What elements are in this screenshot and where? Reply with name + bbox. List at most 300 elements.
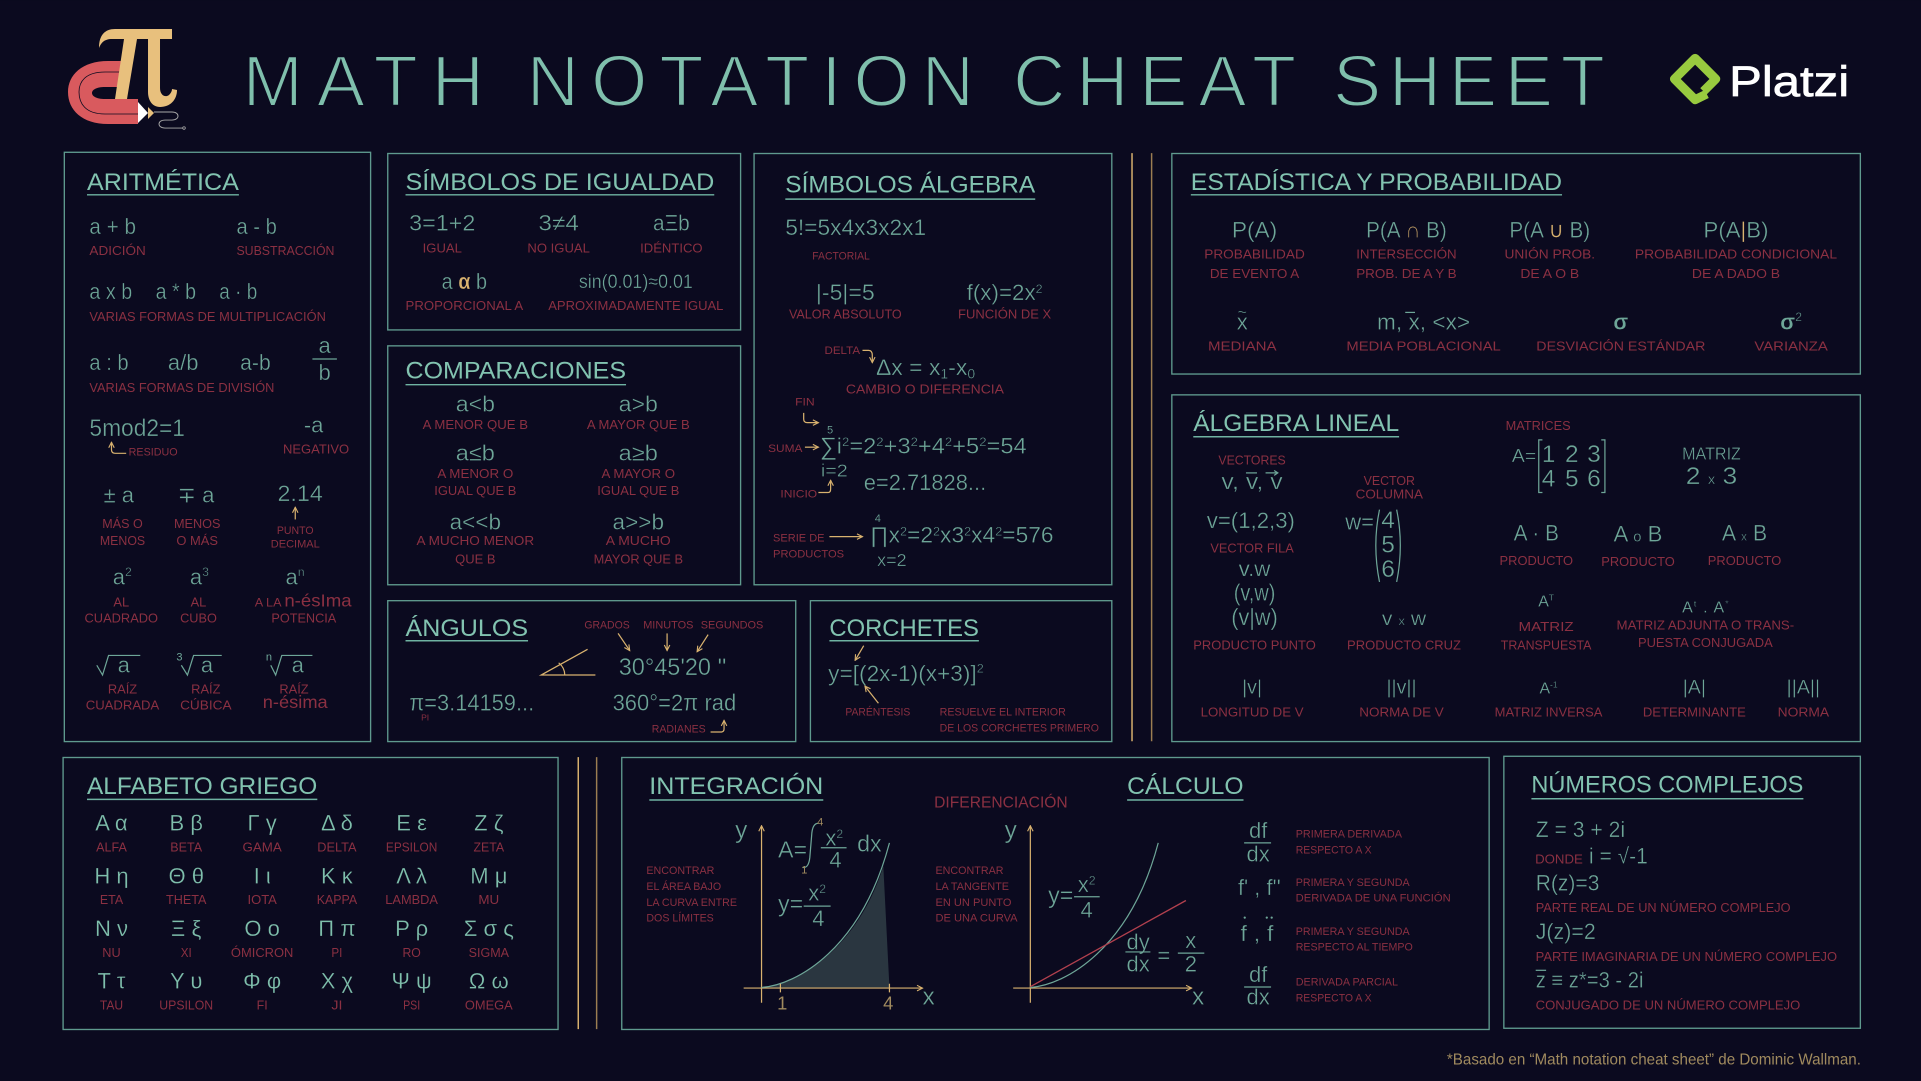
grados minutos segundos [584,619,763,681]
división: a [319,333,332,358]
idéntico [640,210,703,255]
probabilidad condicional: DE A DADO B [1692,266,1780,281]
sumatoria: FIN [795,397,815,409]
menor que: A MENOR QUE B [423,417,528,432]
menor que [423,392,528,432]
producto 3 [1708,520,1781,568]
resuelve el interior [940,706,1099,734]
función de x: 2 [1036,282,1043,296]
matriz 2x3 [1682,443,1741,490]
title: MATH [243,42,484,122]
matriz 2x3: 2 x 3 [1686,463,1737,490]
primera y segunda derivada: DERIVADA DE UNA FUNCIÓN [1296,892,1451,905]
delta: 0 [967,367,975,382]
pi: π=3.14159... [409,690,534,716]
parte imaginaria: J(z)=2 [1536,919,1596,944]
longitud: |v| [1242,676,1262,698]
raíz cúbica: a [201,653,214,678]
igual: IGUAL [423,240,462,255]
donde i [1535,844,1648,869]
fila griega 1: Γ γ [248,811,277,836]
producto punto: (v,w) [1234,579,1275,605]
serie de productos: 2 [964,524,971,538]
texto: encontrar la tangente [936,865,1018,924]
fila griega 2: LAMBDA [385,892,438,907]
matriz adjunta: PUESTA CONJUGADA [1638,635,1773,650]
fila griega 1: Β β [169,811,203,836]
menos o más [174,482,221,548]
radianes: 360°=2π rad [613,690,736,716]
multiplicación [89,279,326,324]
primera derivada: dx [1247,841,1270,866]
vector columna: VECTOR [1364,473,1415,488]
probabilidad condicional: P(A|B) [1704,218,1768,243]
menor o igual: A MENOR O [437,466,513,481]
fórmula: curva integración: y= [778,890,803,916]
serie de productos: 2 [933,524,940,538]
fórmula: dy/dx: x [1185,928,1196,953]
al cuadrado: CUADRADO [85,610,158,625]
fórmula: área: dx [857,830,882,856]
mucho menor [417,509,534,567]
parte real: PARTE REAL DE UN NÚMERO COMPLEJO [1536,900,1791,915]
gráfica: integración: 4 [883,993,893,1014]
resuelve el interior: DE LOS CORCHETES PRIMERO [940,722,1099,734]
intersección [1356,218,1457,281]
función de x: f(x)=2x [967,280,1035,305]
norma: ||A|| [1787,676,1820,698]
división: b [319,360,331,385]
punto decimal: DECIMAL [271,539,320,551]
derivada parcial [1244,962,1398,1010]
sumatoria: 2 [911,435,918,449]
primera y segunda derivada: PRIMERA Y SEGUNDA [1296,877,1410,889]
grados minutos segundos: SEGUNDOS [701,619,763,631]
producto punto: PRODUCTO PUNTO [1193,637,1316,652]
mediana: MEDIANA [1208,338,1277,353]
serie de productos: =2 [907,523,933,548]
substracción [236,214,334,258]
varianza: 2 [1795,310,1802,324]
matrices: 5 [1565,465,1579,492]
matrices: 3 [1587,441,1601,468]
mucho mayor: A MUCHO [606,533,671,548]
delta: DELTA [825,345,861,357]
parte imaginaria [1536,919,1837,964]
radianes: RADIANES [652,724,706,736]
heading: comparaciones: COMPARACIONES [406,358,626,385]
producto cruz: v x w [1382,608,1427,630]
raíz cúbica: CÚBICA [180,697,232,712]
matriz transpuesta: T [1549,592,1555,602]
fila griega 3: ÓMICRON [231,945,293,960]
residuo: RESIDUO [129,447,178,459]
producto punto [1193,558,1316,652]
fila griega 2: Ι ι [254,863,271,888]
fila griega 4 [98,969,513,1013]
texto: encontrar el área: ENCONTRAR [646,865,714,877]
heading: álgebra lineal: ÁLGEBRA LINEAL [1193,410,1399,437]
raíz cúbica: 3 [176,651,183,663]
panel: símbolos álgebra [754,154,1112,585]
gráfica: integración: y [735,817,748,844]
unión [1504,218,1595,281]
al cuadrado [85,564,158,625]
intersección: PROB. DE A Y B [1356,266,1457,281]
conjugado: z ≡ z*=3 - 2i [1536,967,1644,992]
probabilidad condicional [1635,218,1837,281]
raíz cuadrada [86,653,160,712]
sumatoria: 2 [979,435,987,449]
fórmula: curva diferenciación: y= [1048,882,1073,908]
división: a/b [168,350,198,375]
fórmula: curva integración: x [808,880,819,905]
serie de productos: 4 [875,513,881,525]
producto punto: (v|w) [1231,604,1278,630]
grados minutos segundos: 30°45'20 '' [619,654,727,681]
raíz cúbica: RAÍZ [191,681,221,696]
fila griega 1: GAMA [243,839,282,854]
probabilidad de evento: DE EVENTO A [1210,266,1300,281]
función de x: FUNCIÓN DE X [958,307,1052,322]
matrices: MATRICES [1506,418,1571,433]
factorial [785,215,926,263]
matrices: 2 [1565,441,1579,468]
mayor o igual: a≥b [619,441,658,466]
heading: complejos: NÚMEROS COMPLEJOS [1531,772,1803,799]
producto punto: v.w [1239,558,1271,581]
menor o igual: IGUAL QUE B [434,483,516,498]
fórmula: área [778,817,882,877]
serie de productos [773,513,1054,570]
conjugado: CONJUGADO DE UN NÚMERO COMPLEJO [1536,998,1800,1013]
serie de productos: x4 [971,523,995,548]
fila griega 4: JI [331,998,342,1013]
fila griega 3: Σ σ ς [464,916,514,941]
probabilidad de evento: PROBABILIDAD [1204,247,1305,262]
al cubo [180,564,217,625]
residuo: 5mod2=1 [89,415,185,442]
al cubo: 3 [202,565,209,579]
negativo [283,412,349,456]
primera derivada: RESPECTO A X [1296,844,1372,856]
texto: encontrar el área: LA CURVA ENTRE [646,897,737,909]
fila griega 4: Χ χ [321,969,354,994]
fila griega 4: Τ τ [98,969,126,994]
vector columna: 5 [1381,532,1395,559]
panel: símbolos de igualdad [388,154,741,330]
conjugado [1536,967,1800,1013]
fila griega 4: Υ υ [170,969,202,994]
serie de productos: 2 [995,524,1002,538]
mucho menor: a<<b [450,509,501,534]
raíz n-ésima: RAÍZ [279,681,309,696]
heading: igualdad: SÍMBOLOS DE IGUALDAD [406,169,714,196]
sumatoria: SUMA [768,443,803,455]
menos o más: ∓ a [178,482,215,507]
fila griega 1: ZETA [474,839,505,854]
sumatoria: +3 [884,433,911,458]
nota al pie: *Basado en “Math notation cheat sheet” de Dominic Wallman. [1447,1052,1861,1069]
al cubo: AL [191,594,206,609]
multiplicación: a x b [89,279,132,304]
punto decimal: PUNTO [277,525,314,537]
texto: encontrar el área [646,865,737,924]
aproximadamente igual: sin(0.01)≈0.01 [579,271,693,293]
serie de productos: 2 [900,524,907,538]
no igual: 3≠4 [538,210,579,235]
fórmula: curva diferenciación: x [1078,872,1089,897]
panel: alfabeto griego [63,758,558,1029]
fórmula corchetes: y=[(2x-1)(x+3)] [828,661,973,686]
gráfica: diferenciación: x [1192,984,1204,1011]
punto decimal: 2.14 [277,481,323,506]
forma general: Z = 3 + 2i [1536,817,1625,842]
fila griega 4: Ω ω [469,969,509,994]
vector columna: w= [1344,509,1374,534]
adición: ADICIÓN [89,243,146,258]
raíz n-ésima: n [266,651,272,663]
delta: CAMBIO O DIFERENCIA [846,381,1004,396]
fórmula: dy/dx: dx [1126,952,1150,977]
matriz inversa: -1 [1550,679,1558,689]
más o menos: MÁS O [102,516,143,531]
vector columna: 4 [1381,507,1395,534]
heading: ángulos: ÁNGULOS [406,615,528,642]
norma de v [1359,676,1444,720]
sumatoria: ∑ [820,434,837,461]
fila griega 2: Θ θ [168,863,204,888]
mayor o igual: A MAYOR O [602,466,675,481]
más o menos: MENOS [100,533,145,548]
logo: Platzi: Platzi [1729,58,1849,106]
producto cruz [1347,608,1461,652]
mediana: x [1237,310,1248,335]
determinante: |A| [1683,676,1706,698]
al cuadrado: 2 [125,565,132,579]
matrices: 4 [1542,465,1555,492]
matriz transpuesta: A [1538,593,1549,610]
gráfica: integración: x [923,984,935,1011]
substracción: a - b [236,214,277,239]
donde i: i = √-1 [1589,844,1648,869]
heading: álgebra: SÍMBOLOS ÁLGEBRA [785,171,1036,198]
matriz transpuesta [1501,592,1592,652]
texto: encontrar el área: DOS LÍMITES [646,911,714,924]
matriz inversa: MATRIZ INVERSA [1495,705,1603,720]
unión: P(A ∪ B) [1509,218,1590,243]
serie de productos: ∏x [870,523,899,548]
fila griega 3: NU [102,945,121,960]
fórmula corchetes [828,646,984,703]
división: a-b [240,350,271,375]
norma de v: NORMA DE V [1359,705,1444,720]
fila griega 1: Α α [95,811,128,836]
intersección: P(A ∩ B) [1366,218,1447,243]
producto 1 [1500,520,1573,568]
producto 3: PRODUCTO [1708,553,1781,568]
gráfica: integración: 1 [777,993,787,1014]
vectores: v, v, v [1221,469,1283,494]
fila griega 3: RO [402,945,421,960]
icono: ángulo [541,649,595,675]
mucho menor: QUE B [455,552,496,567]
proporcional [406,269,524,313]
parte imaginaria: PARTE IMAGINARIA DE UN NÚMERO COMPLEJO [1536,949,1837,964]
matriz inversa: A [1539,680,1550,697]
resuelve el interior: RESUELVE EL INTERIOR [940,706,1066,718]
pi: PI [421,712,429,722]
producto cruz: PRODUCTO CRUZ [1347,637,1461,652]
multiplicación: a · b [219,279,257,304]
serie de productos: x=2 [877,550,907,570]
fila griega 4: Φ φ [243,969,281,994]
matriz adjunta: t [1694,598,1697,608]
fórmula: área: x [825,825,836,850]
fórmula: curva diferenciación: 2 [1089,874,1096,888]
title [243,42,1605,122]
fórmula: área: 4 [829,847,842,872]
primera derivada [1244,818,1403,866]
fórmula: dy/dx: = [1157,943,1170,968]
producto 1: PRODUCTO [1500,553,1573,568]
determinante [1643,676,1746,720]
matriz adjunta: * [1725,598,1729,608]
title: SHEET [1333,42,1605,122]
norma [1778,676,1830,720]
derivada parcial: RESPECTO A X [1296,993,1372,1005]
panel: aritmética [64,152,371,742]
mayor o igual: IGUAL QUE B [597,483,679,498]
primera derivada: PRIMERA DERIVADA [1296,828,1403,840]
fórmula corchetes: 2 [977,662,984,676]
media poblacional: m, x, <x> [1377,310,1470,335]
parte real: R(z)=3 [1536,871,1599,896]
menor o igual [434,441,516,498]
sumatoria: i=2 [821,461,848,481]
adición: a + b [89,214,136,239]
número e: e=2.71828... [864,470,986,495]
heading: integración: INTEGRACIÓN [649,773,823,800]
vector fila [1207,508,1295,556]
igual: 3=1+2 [409,210,475,235]
raíz cuadrada: RAÍZ [108,681,137,696]
mayor que [587,392,690,432]
fila griega 3: Ο ο [244,916,280,941]
gráfica: integración [735,817,935,1014]
heading: griego: ALFABETO GRIEGO [87,773,317,800]
varianza: σ [1780,310,1795,335]
unión: DE A O B [1520,266,1579,281]
logo: pi and pencil [68,29,185,129]
separador vertical superior [1132,153,1152,741]
fila griega 3: Π π [318,916,356,941]
vector columna: 6 [1381,556,1395,583]
vectores [1218,452,1286,494]
no igual [527,210,590,255]
texto: encontrar la tangente: LA TANGENTE [936,881,1009,893]
grados minutos segundos: GRADOS [584,619,630,631]
media poblacional [1346,310,1501,353]
fórmula: curva integración: 4 [812,906,825,931]
derivada respecto al tiempo: RESPECTO AL TIEMPO [1296,942,1413,954]
raíz cuadrada: CUADRADA [86,697,160,712]
fila griega 2: THETA [166,892,207,907]
media poblacional: MEDIA POBLACIONAL [1346,338,1501,353]
fila griega 2: Η η [94,863,129,888]
primera y segunda derivada [1238,875,1451,905]
más o menos [100,482,145,548]
raíz n-ésima: a [292,653,305,678]
fórmula: dy/dx: dy [1126,929,1150,954]
más o menos: ± a [104,482,135,507]
donde i: DONDE [1535,852,1583,867]
fila griega 4: UPSILON [159,998,213,1013]
proporcional: a α b [442,269,487,294]
fila griega 3 [95,916,514,960]
probabilidad condicional: PROBABILIDAD CONDICIONAL [1635,247,1837,262]
fila griega 2: Λ λ [396,863,427,888]
fila griega 1: Ζ ζ [474,811,504,836]
factorial: FACTORIAL [812,251,870,263]
sumatoria [768,397,1027,500]
fila griega 2: KAPPA [317,892,358,907]
fila griega 3: Ξ ξ [171,916,202,941]
potencia [255,564,352,625]
fórmula: curva diferenciación: 4 [1081,898,1093,923]
fila griega 2: IOTA [247,892,277,907]
fila griega 2: Κ κ [321,863,354,888]
derivada parcial: dx [1247,985,1270,1010]
producto 1: A · B [1514,520,1559,545]
mediana [1208,304,1277,353]
valor absoluto [789,280,902,322]
fila griega 2: Μ μ [470,863,507,888]
desviación estándar: σ [1613,310,1628,335]
adición [89,214,146,258]
división [89,333,337,395]
sumatoria: 2 [842,435,850,449]
fila griega 3: Ν ν [95,916,128,941]
al cuadrado: a [113,564,125,589]
texto: encontrar la tangente: EN UN PUNTO [936,897,1012,909]
sumatoria: INICIO [780,488,818,500]
vectores: VECTORES [1218,452,1286,467]
división: a : b [89,350,129,375]
fila griega 3: PI [331,945,342,960]
matriz adjunta: . A [1698,600,1724,617]
proporcional: PROPORCIONAL A [406,298,524,313]
sumatoria: +4 [918,433,945,458]
delta: 1 [940,367,948,382]
radianes [613,690,736,736]
fila griega 4: PSI [403,998,420,1013]
fila griega 1: EPSILON [386,839,437,854]
derivada parcial: df [1249,962,1268,987]
derivada parcial: DERIVADA PARCIAL [1296,977,1398,989]
menos o más: O MÁS [176,533,218,548]
aproximadamente igual [548,271,723,313]
grados minutos segundos: MINUTOS [643,619,693,631]
fila griega 2: MU [478,892,499,907]
texto: encontrar el área: EL ÁREA BAJO [646,880,722,893]
desviación estándar: DESVIACIÓN ESTÁNDAR [1536,338,1705,353]
fila griega 1: BETA [170,839,203,854]
mayor que: a>b [619,392,658,417]
varianza [1754,310,1828,353]
probabilidad de evento: P(A) [1232,218,1277,243]
subtítulo: diferenciación: DIFERENCIACIÓN [934,792,1068,811]
